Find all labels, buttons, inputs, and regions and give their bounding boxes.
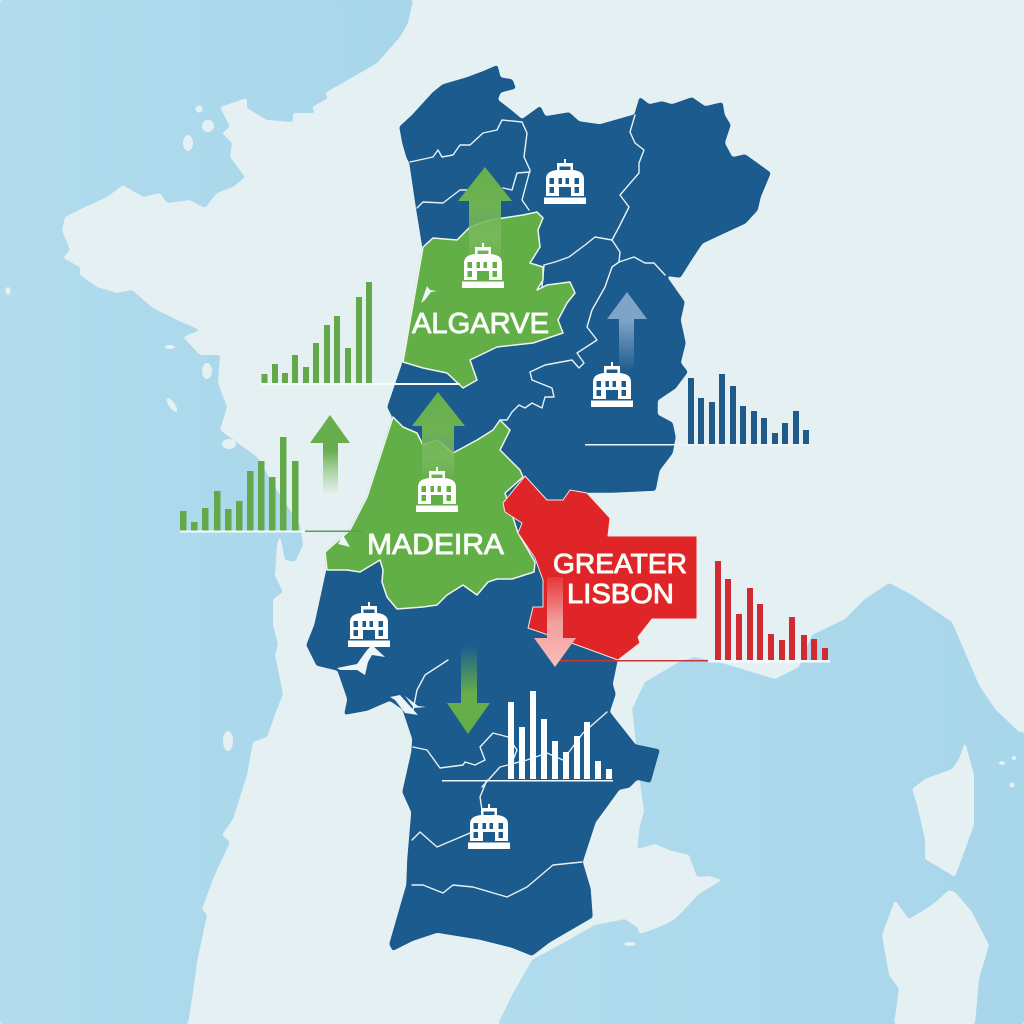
building icon: Algarve <box>462 243 504 288</box>
region: Greater Lisbon with label box <box>503 476 697 660</box>
sea: Atlantic and bay <box>0 0 413 1024</box>
Portugal mainland base <box>307 66 770 955</box>
bar chart: green rising lower <box>180 437 363 532</box>
arrow down: Lisbon <box>534 577 576 667</box>
island: Corsica <box>912 742 974 877</box>
arrow up: east region <box>607 292 647 372</box>
estuaries <box>337 645 426 715</box>
sea: south-east basin <box>498 583 1024 1024</box>
label: Madeira: MADEIRA <box>367 529 504 561</box>
bar chart: blue falling <box>585 374 809 446</box>
arrow up: coast <box>310 415 350 495</box>
label: Greater Lisbon <box>553 548 687 609</box>
bar chart: green rising upper <box>261 282 460 385</box>
bar chart: white on south region <box>442 691 613 782</box>
building icon: north <box>544 159 586 204</box>
label: Greater Lisbon: GREATER <box>553 548 687 579</box>
building icon: west <box>348 602 390 647</box>
region: Madeira <box>325 417 535 609</box>
building icon: south <box>468 804 510 849</box>
label: Algarve: ALGARVE <box>412 308 549 340</box>
arrow down: south <box>447 645 490 734</box>
inlet on Algarve coast <box>421 286 437 303</box>
region: Algarve <box>403 212 575 388</box>
inlet on Madeira coast <box>338 535 350 547</box>
building icon: Madeira <box>416 467 458 512</box>
arrow up: Madeira <box>412 392 465 480</box>
region borders <box>410 115 665 897</box>
island: Sardinia <box>882 890 989 1024</box>
building icon: east <box>591 362 633 407</box>
arrow up: Algarve <box>458 167 512 262</box>
bar chart: red falling <box>560 561 830 662</box>
label: Greater Lisbon: LISBON <box>567 578 674 609</box>
